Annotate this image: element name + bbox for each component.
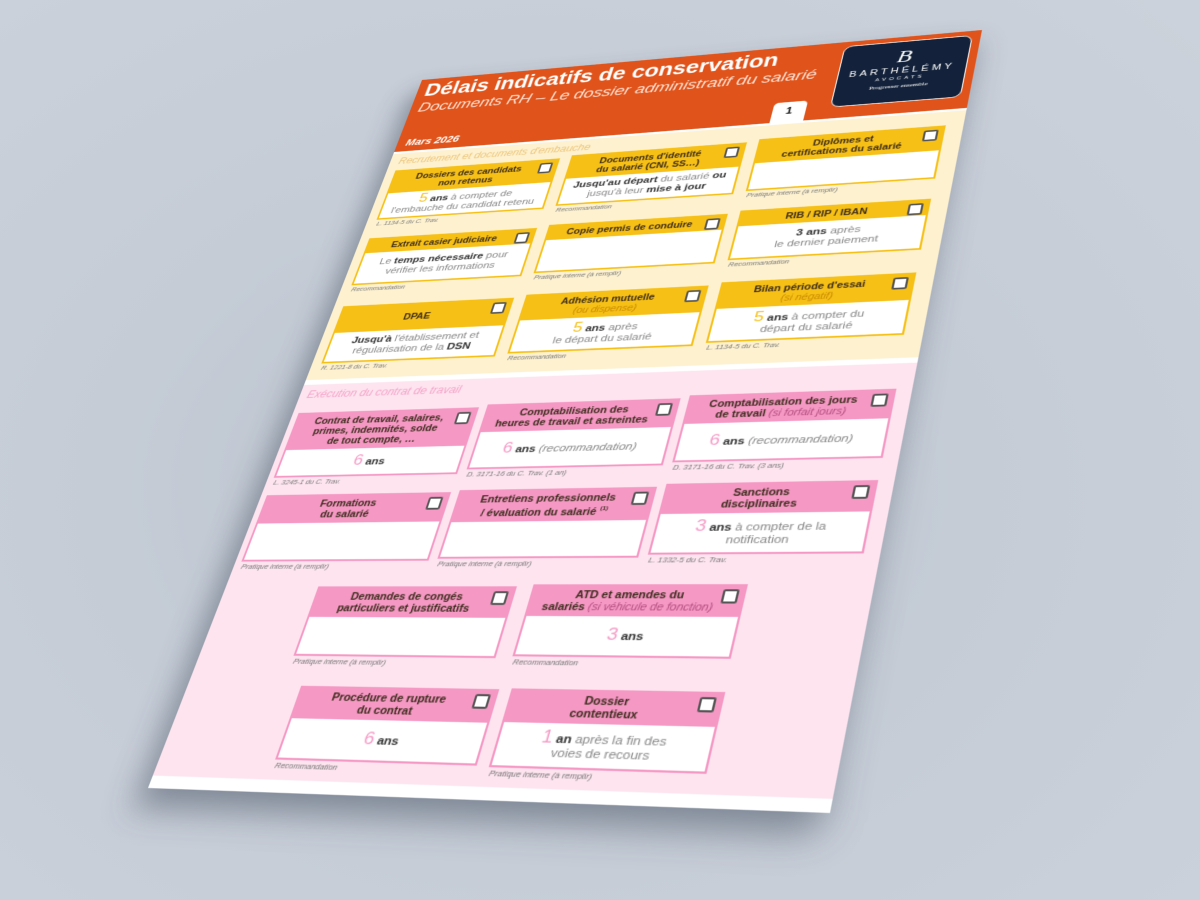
box: diplômes: certifications du salarié (780, 141, 903, 159)
box: contrat de travail: Contrat de travail, salaires, (313, 413, 445, 427)
box: sanctions (648, 480, 878, 555)
page: perspective document: Recommandation (512, 657, 579, 667)
box: jours de travail: de travail (si forfait jours) (714, 406, 847, 420)
panel: exécution du contrat (153, 363, 917, 799)
logo: Progresser ensemble (868, 81, 928, 91)
logo: B (895, 47, 914, 67)
box: DPAE (321, 298, 514, 364)
box: période d'essai: départ du salarié (759, 320, 854, 334)
box: heures de travail: heures de travail et astreintes (493, 414, 649, 429)
page: perspective document: L. 1332-5 du C. Trav. (647, 555, 728, 564)
box: heures de travail: Comptabilisation des (518, 404, 630, 418)
box: dossiers candidats: 5 ans à compter de (417, 189, 514, 205)
box: jours de travail: Comptabilisation des jours (708, 394, 859, 410)
page: perspective document: Pratique interne (à remplir) (488, 768, 593, 782)
box: diplômes (746, 125, 946, 191)
box: jours de travail (672, 389, 897, 462)
page: perspective document: Pratique interne (à remplir) (746, 186, 839, 199)
box: RIB: 3 ans après (795, 225, 862, 238)
box: dossier contentieux (489, 688, 725, 774)
box: ATD amendes (512, 584, 748, 659)
box: mutuelle: 5 ans après (571, 319, 639, 335)
box: dossier contentieux: 1 an après la fin des (540, 726, 668, 748)
box: rupture du contrat (275, 686, 499, 766)
subtitle: Documents RH – Le dossier administratif du salarié (416, 67, 818, 115)
page: perspective document: D. 3171-16 du C. Trav. (1 an) (466, 468, 568, 478)
box: congés particuliers: particuliers et justificatifs (335, 603, 471, 615)
box: ATD amendes: 3 ans (605, 624, 645, 644)
logo: AVOCATS (875, 74, 925, 83)
page: perspective document: Recommandation (727, 258, 790, 268)
box: période d'essai: Bilan période d'essai (753, 279, 866, 295)
box: contrat de travail: de tout compte, … (325, 434, 417, 447)
box: DPAE: DPAE (402, 311, 432, 322)
box: dossier contentieux: voies de recours (549, 747, 651, 763)
box: entretiens: Entretiens professionnels (479, 492, 617, 505)
page tab (769, 101, 808, 123)
box: mutuelle: Adhésion mutuelle (560, 292, 656, 307)
box: contrat de travail: primes, indemnités, solde (311, 423, 439, 437)
box: RIB: le dernier paiement (773, 234, 879, 250)
box: RIB (728, 199, 931, 260)
box: documents identité (555, 142, 747, 206)
box: sanctions: disciplinaires (720, 498, 798, 510)
box: ATD amendes: ATD et amendes du (574, 589, 686, 601)
box: dossier contentieux: contentieux (568, 707, 639, 722)
page: perspective document: Pratique interne (à remplir) (292, 657, 387, 667)
box: documents identité: Documents d'identité (598, 149, 703, 166)
box: entretiens: / évaluation du salarié (1) (479, 506, 609, 519)
page: perspective document: R. 1221-8 du C. Trav. (320, 362, 389, 372)
page: perspective document: Recommandation (555, 203, 613, 213)
box: heures de travail (467, 398, 681, 469)
box: dossier contentieux: Dossier (583, 695, 631, 709)
box: DPAE: Jusqu'à l'établissement et (350, 330, 480, 346)
box: dossiers candidats: non retenus (437, 175, 494, 188)
box: permis (534, 214, 728, 273)
box: casier judiciaire: vérifier les informations (384, 261, 496, 276)
box: congés particuliers (293, 586, 517, 658)
box: congés particuliers: Demandes de congés (349, 591, 464, 603)
box: contrat de travail (274, 407, 479, 478)
box: documents identité: Jusqu'au départ du salarié ou (572, 170, 728, 190)
logo: BARTHÉLÉMY (848, 62, 956, 79)
box: dossiers candidats: Dossiers des candidats (414, 165, 523, 181)
box: jours de travail: 6 ans (recommandation) (708, 431, 854, 449)
box: dossiers candidats (377, 158, 560, 220)
box: rupture du contrat: du contrat (355, 704, 414, 718)
page: perspective document: Recommandation (273, 761, 339, 772)
page: perspective document: Recommandation (507, 352, 567, 362)
page: perspective document: L. 1134-5 du C. Trav. (706, 341, 781, 351)
box: rupture du contrat: Procédure de rupture (330, 691, 448, 706)
box: période d'essai: (si négatif) (779, 291, 834, 303)
date: Mars 2026 (404, 134, 461, 148)
page: perspective document: D. 3171-16 du C. Trav. (3 ans) (672, 461, 785, 472)
box: période d'essai: 5 ans à compter du (752, 308, 865, 324)
page: perspective document: Pratique interne (à remplir) (533, 269, 622, 281)
logo (830, 35, 973, 107)
header band (394, 30, 982, 152)
box: formations: du salarié (318, 509, 370, 520)
panel: recrutement (306, 110, 966, 380)
box: diplômes: Diplômes et (812, 134, 875, 148)
box: mutuelle: le départ du salarié (551, 331, 653, 346)
box: sanctions: 3 ans à compter de la (694, 516, 828, 534)
section label: Recrutement et documents d'embauche (397, 142, 592, 166)
page: perspective document: L. 3245-1 du C. Trav. (272, 477, 342, 486)
box: période d'essai (706, 272, 916, 343)
box: casier judiciaire: Le temps nécessaire pour (378, 250, 509, 267)
page: perspective document: Recommandation (350, 283, 406, 293)
box: mutuelle (507, 285, 709, 354)
page: perspective document: L. 1134-5 du C. Trav. (375, 216, 440, 227)
box: rupture du contrat: 6 ans (361, 728, 401, 749)
box: sanctions: Sanctions (732, 486, 791, 499)
page: perspective document (148, 30, 982, 813)
box: ATD amendes: salariés (si véhicule de fonction) (540, 601, 714, 614)
page: perspective document: Pratique interne (à remplir) (436, 559, 533, 568)
box: formations: Formations (318, 498, 378, 509)
box: casier judiciaire (351, 228, 537, 285)
box: mutuelle: (ou dispense) (572, 303, 638, 316)
page: perspective document: Pratique interne (à remplir) (240, 562, 330, 571)
section label: Exécution du contrat de travail (305, 383, 463, 400)
box: heures de travail: 6 ans (recommandation) (500, 439, 638, 456)
box: sanctions: notification (724, 533, 790, 546)
box: RIB: RIB / RIP / IBAN (784, 207, 868, 221)
box: dossiers candidats: l'embauche du candidat retenu (390, 197, 536, 215)
box: DPAE: régularisation de la DSN (351, 341, 472, 356)
page tab: 1 (784, 105, 794, 116)
box: documents identité: jusqu'à leur mise à jour (586, 182, 707, 199)
box: documents identité: du salarié (CNI, SS…) (595, 158, 701, 175)
title: Délais indicatifs de conservation (422, 50, 781, 100)
box: casier judiciaire: Extrait casier judiciaire (390, 234, 498, 250)
box: formations (241, 492, 451, 562)
box: entretiens (437, 487, 657, 559)
box: contrat de travail: 6 ans (351, 452, 387, 468)
box: permis: Copie permis de conduire (565, 220, 694, 237)
